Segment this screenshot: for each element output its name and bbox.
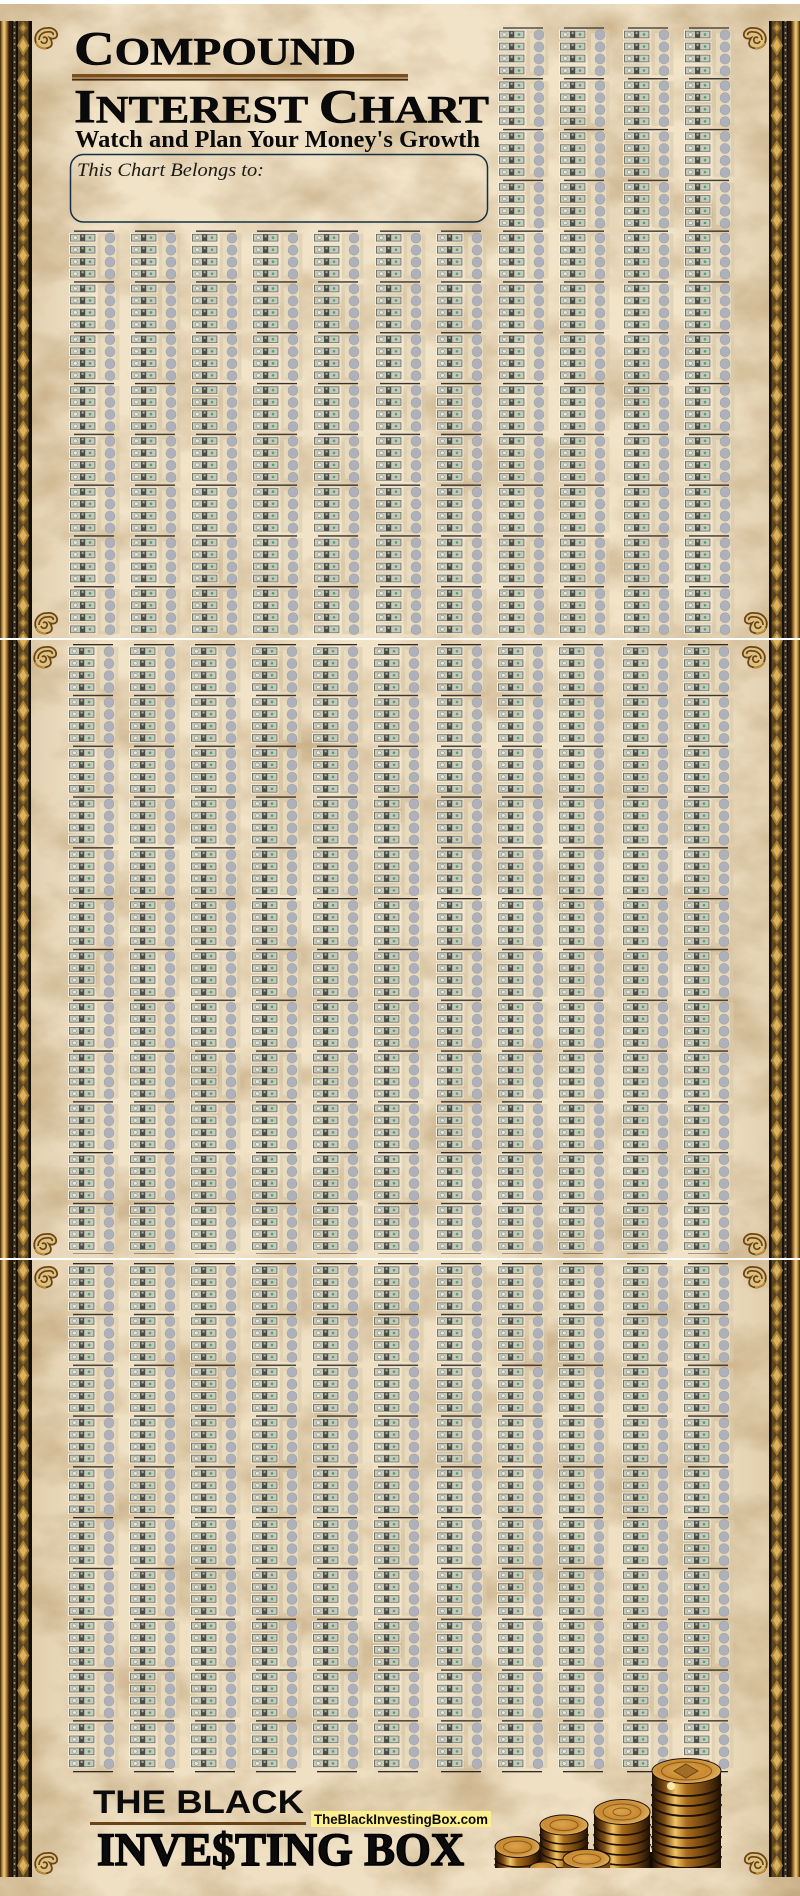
chart grid: middle sheet <box>68 644 735 1254</box>
heading: Compound: COMPOUND <box>74 22 356 76</box>
corner swirl bottom right <box>745 1853 767 1873</box>
column 8 <box>497 644 549 1254</box>
right ornamental border <box>769 640 800 1258</box>
corner swirl top left <box>35 28 57 48</box>
corner swirl bottom left <box>35 1853 57 1873</box>
left ornamental border <box>0 21 32 638</box>
corner swirl top left <box>34 647 56 667</box>
column 10 <box>623 27 675 636</box>
column 7 <box>436 644 488 1254</box>
panel: upper parchment sheet <box>0 4 800 638</box>
chart grid: upper sheet, short columns <box>69 230 488 636</box>
title <box>72 22 489 153</box>
column 2 <box>129 644 181 1254</box>
subtitle: Watch and Plan Your Money's Growth <box>75 127 480 153</box>
column 8 <box>498 27 550 636</box>
coin stack B <box>540 1815 588 1868</box>
right ornamental border <box>769 21 800 638</box>
column 8 <box>497 1263 549 1772</box>
chart grid: lower sheet <box>68 1263 735 1772</box>
coin stack D <box>652 1758 721 1868</box>
coin stack A <box>494 1836 540 1868</box>
column 11 <box>683 1263 735 1772</box>
column 6 <box>373 644 425 1254</box>
logo text: The Black: THE BLACK <box>93 1784 304 1820</box>
icon: gold coin stacks <box>495 1758 721 1874</box>
corner swirl top right <box>743 647 765 667</box>
column 10 <box>622 1263 674 1772</box>
column 1 <box>68 1263 120 1772</box>
column 5 <box>312 644 364 1254</box>
column 7 <box>436 1263 488 1772</box>
logo: The Black Investing Box <box>90 1784 491 1876</box>
column 9 <box>559 27 611 636</box>
corner swirl bottom left <box>35 613 57 633</box>
column 1 <box>69 230 121 636</box>
column 5 <box>312 1263 364 1772</box>
logo rule <box>90 1822 306 1825</box>
front coin <box>563 1850 610 1868</box>
panel: lower parchment sheet <box>0 1260 800 1896</box>
column 11 <box>684 27 736 636</box>
name box label: This Chart Belongs to: <box>77 160 264 181</box>
column 4 <box>251 644 303 1254</box>
column 3 <box>190 1263 242 1772</box>
column 3 <box>190 644 242 1254</box>
column 6 <box>375 230 427 636</box>
column 1 <box>68 644 120 1254</box>
left ornamental border <box>0 640 31 1258</box>
panel: middle parchment sheet <box>0 640 800 1258</box>
small front coin <box>529 1862 557 1868</box>
column 10 <box>622 644 674 1254</box>
right ornamental border <box>769 1260 800 1877</box>
column 3 <box>191 230 243 636</box>
corner swirl top left <box>35 1267 57 1287</box>
corner swirl bottom right <box>744 1234 766 1254</box>
corner swirl top right <box>744 28 766 48</box>
logo text: Investing Box: INVE$TING BOX <box>97 1824 464 1876</box>
column 9 <box>558 1263 610 1772</box>
column 4 <box>252 230 304 636</box>
column 2 <box>129 1263 181 1772</box>
column 9 <box>558 644 610 1254</box>
column 7 <box>436 230 488 636</box>
column 11 <box>683 644 735 1254</box>
corner swirl bottom right <box>745 613 767 633</box>
column 5 <box>313 230 365 636</box>
left ornamental border <box>0 1260 32 1877</box>
name box <box>70 154 488 222</box>
column 6 <box>373 1263 425 1772</box>
title rule <box>72 74 408 81</box>
column 4 <box>251 1263 303 1772</box>
column 2 <box>130 230 182 636</box>
corner swirl bottom left <box>34 1234 56 1254</box>
website badge: TheBlackInvestingBox.com <box>314 1812 488 1827</box>
heading: Interest Chart: INTEREST CHART <box>74 81 489 134</box>
coin stack C <box>594 1800 650 1868</box>
chart grid: upper sheet, tall columns <box>498 27 736 636</box>
corner swirl top right <box>744 1267 766 1287</box>
